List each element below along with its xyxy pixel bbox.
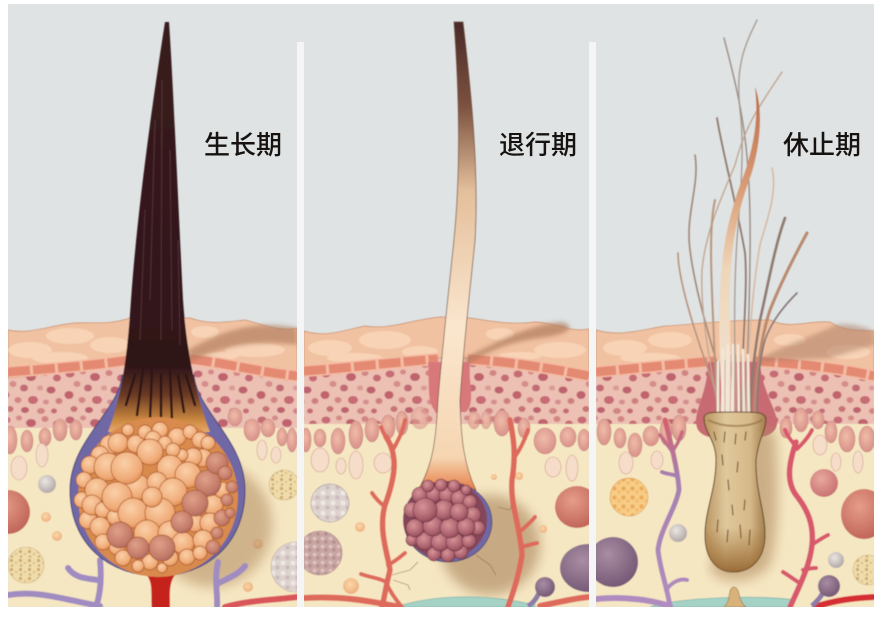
skin cross-section <box>304 317 589 607</box>
label: 生长期: 生长期 <box>204 130 282 160</box>
skin cross-section <box>596 320 874 607</box>
panel: resting phase (telogen) <box>588 20 887 607</box>
label: 退行期: 退行期 <box>499 130 577 160</box>
bulb shadow <box>440 495 540 595</box>
white divider right <box>589 42 596 607</box>
teal band <box>395 597 535 607</box>
hair strands <box>678 20 807 420</box>
dermal papillae <box>3 408 297 480</box>
hair shaft <box>418 22 476 490</box>
follicle sheath <box>70 375 245 576</box>
purple vessel bulb <box>812 575 840 606</box>
dermis cells <box>0 475 263 592</box>
skin cross-section <box>8 318 297 607</box>
textured cells right <box>268 469 297 593</box>
hair bulb with cells <box>74 417 238 577</box>
dermal papillae <box>597 408 875 474</box>
purple vessel <box>596 420 687 607</box>
hair shaft <box>108 22 210 432</box>
panel: growth phase (anagen) <box>8 21 297 607</box>
panel: regression phase (catagen) <box>304 20 589 607</box>
hairline cracks <box>392 505 512 590</box>
club hair follicle <box>704 412 766 572</box>
purple vessel bulb <box>528 577 555 606</box>
blood vessels: purple and red <box>8 560 297 610</box>
shrinking hair bulb <box>403 479 492 562</box>
blood vessels <box>304 420 589 607</box>
white divider left <box>297 42 304 607</box>
club shadow <box>710 430 777 581</box>
dermal papillae <box>301 407 590 481</box>
teal band and bump <box>650 587 795 607</box>
red vessel <box>783 430 874 607</box>
dermis cells <box>298 472 616 594</box>
label: 休止期: 休止期 <box>783 130 861 160</box>
dermis cells <box>588 469 887 587</box>
bulb shadow <box>173 465 278 593</box>
